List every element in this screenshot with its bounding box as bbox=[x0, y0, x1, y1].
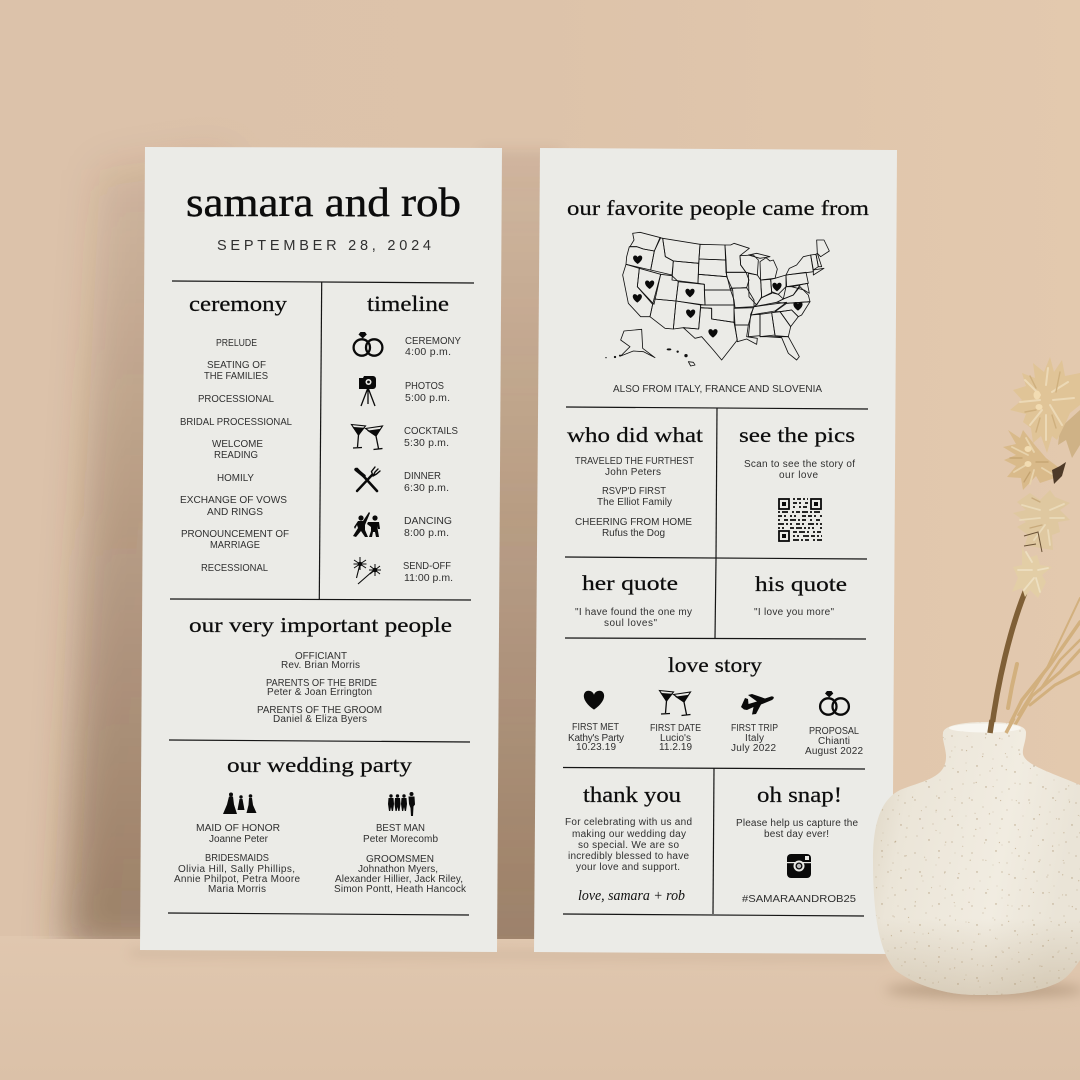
groom party names bbox=[334, 823, 467, 895]
first trip: Italy bbox=[745, 733, 764, 744]
see the pics text: our love bbox=[779, 470, 818, 481]
people list: OFFICIANT bbox=[295, 651, 347, 662]
icon: rings bbox=[820, 691, 849, 715]
people list bbox=[257, 651, 382, 725]
timeline dinner bbox=[404, 470, 449, 494]
panel: his quote bbox=[754, 572, 847, 618]
floor contact shadow bbox=[130, 951, 890, 959]
people list: PARENTS OF THE BRIDE bbox=[266, 678, 377, 689]
US map with hearts bbox=[605, 232, 829, 366]
bridal party names: Joanne Peter bbox=[209, 834, 269, 845]
vase mouth bbox=[949, 724, 1021, 732]
vase bbox=[873, 718, 1080, 998]
first met: 10.23.19 bbox=[576, 742, 616, 753]
first trip: FIRST TRIP bbox=[731, 723, 778, 734]
floor bbox=[0, 936, 1080, 1080]
heading: important people: our very important people bbox=[189, 613, 452, 637]
heading: timeline: timeline bbox=[367, 291, 449, 316]
panel: ceremony bbox=[180, 291, 292, 574]
left card bbox=[140, 147, 502, 952]
panel: timeline bbox=[352, 291, 461, 584]
thank you message: so special. We are so bbox=[578, 840, 679, 851]
ceremony order list: READING bbox=[214, 449, 258, 461]
icon: heart bbox=[584, 691, 604, 710]
ceremony order list: HOMILY bbox=[217, 472, 254, 484]
bridal party names: Olivia Hill, Sally Phillips, bbox=[178, 864, 295, 875]
hashtag: #SAMARAANDROB25 bbox=[742, 893, 856, 905]
see the pics text: Scan to see the story of bbox=[744, 459, 855, 470]
thank you message: making our wedding day bbox=[572, 829, 686, 840]
bridal party names bbox=[174, 823, 300, 895]
ceremony order list: EXCHANGE OF VOWS bbox=[180, 494, 287, 506]
first trip bbox=[731, 723, 778, 754]
people list: Daniel & Eliza Byers bbox=[273, 714, 367, 725]
card shadows bbox=[65, 150, 560, 950]
panel: our wedding party bbox=[174, 753, 467, 895]
heading: ceremony: ceremony bbox=[189, 291, 288, 316]
panel: oh snap bbox=[736, 782, 858, 905]
who did what list: The Elliot Family bbox=[597, 497, 672, 508]
panel: her quote bbox=[575, 571, 692, 629]
timeline cocktails bbox=[404, 425, 458, 449]
thank you message bbox=[565, 817, 692, 873]
heading: thank you: thank you bbox=[583, 782, 681, 807]
who did what list: Rufus the Dog bbox=[602, 528, 665, 539]
left card paper bbox=[140, 147, 502, 952]
groom party names: Simon Pontt, Heath Hancock bbox=[334, 884, 467, 895]
timeline send-off: 11:00 p.m. bbox=[404, 572, 453, 584]
ceremony order list: AND RINGS bbox=[207, 506, 263, 518]
map caption: ALSO FROM ITALY, FRANCE AND SLOVENIA bbox=[613, 383, 822, 395]
first date: Lucio's bbox=[660, 733, 691, 744]
timeline cocktails: 5:30 p.m. bbox=[404, 437, 449, 449]
vase shadow bbox=[885, 982, 1080, 998]
thank you message: incredibly blessed to have bbox=[568, 851, 689, 862]
icon: cocktail glasses bbox=[352, 424, 382, 450]
timeline dinner: 6:30 p.m. bbox=[404, 482, 449, 494]
vase speckles second layer bbox=[873, 722, 1080, 995]
icon: cocktail glasses bbox=[660, 690, 690, 716]
who did what list: CHEERING FROM HOME bbox=[575, 517, 692, 528]
timeline dancing: 8:00 p.m. bbox=[404, 527, 449, 539]
see the pics text bbox=[744, 459, 855, 481]
timeline send-off bbox=[403, 560, 453, 584]
stems entering mouth bbox=[990, 718, 1014, 733]
panel: thank you bbox=[565, 782, 692, 904]
ceremony order list: BRIDAL PROCESSIONAL bbox=[180, 416, 292, 428]
timeline ceremony: CEREMONY bbox=[405, 335, 461, 347]
timeline photos: PHOTOS bbox=[405, 380, 444, 392]
icon: sparklers bbox=[354, 557, 381, 584]
ceremony order list: SEATING OF bbox=[207, 359, 266, 371]
who did what list: RSVP'D FIRST bbox=[602, 486, 666, 497]
her quote text bbox=[575, 607, 692, 629]
date: SEPTEMBER 28, 2024 bbox=[217, 238, 431, 254]
panel: who did what bbox=[567, 423, 703, 539]
timeline dancing bbox=[404, 515, 452, 539]
right card paper bbox=[534, 148, 897, 954]
icon: dancers bbox=[353, 512, 380, 537]
groom party names: Peter Morecomb bbox=[363, 834, 438, 845]
his quote text: "I love you more" bbox=[754, 607, 834, 618]
first date bbox=[650, 723, 701, 753]
first date: FIRST DATE bbox=[650, 723, 701, 734]
first met: FIRST MET bbox=[572, 722, 619, 733]
first trip: July 2022 bbox=[731, 743, 776, 754]
her quote text: soul loves" bbox=[604, 618, 657, 629]
main stem bbox=[991, 592, 1025, 733]
timeline dancing: DANCING bbox=[404, 515, 452, 527]
people list: Rev. Brian Morris bbox=[281, 660, 360, 671]
heading: who did what: who did what bbox=[567, 423, 703, 447]
proposal bbox=[805, 726, 863, 757]
bridal party names: Annie Philpot, Petra Moore bbox=[174, 874, 300, 885]
people list: PARENTS OF THE GROOM bbox=[257, 705, 382, 716]
vase speckles bbox=[873, 722, 1080, 995]
groom party names: GROOMSMEN bbox=[366, 854, 434, 865]
icon: instagram camera bbox=[787, 854, 811, 878]
ceremony order list: PROCESSIONAL bbox=[198, 393, 274, 405]
heading: her quote: her quote bbox=[582, 571, 678, 595]
thank you message: For celebrating with us and bbox=[565, 817, 692, 828]
dried plant bbox=[991, 357, 1080, 733]
ceremony order list: THE FAMILIES bbox=[204, 370, 268, 382]
icon: rings bbox=[354, 332, 382, 356]
panel: our favorite people came from bbox=[567, 196, 869, 395]
vase body bbox=[873, 722, 1080, 995]
ceremony order list: PRELUDE bbox=[216, 337, 257, 349]
panel: our very important people bbox=[189, 613, 452, 725]
timeline ceremony: 4:00 p.m. bbox=[405, 346, 451, 358]
vase base shading bbox=[873, 722, 1080, 995]
oh snap message: best day ever! bbox=[764, 829, 829, 840]
grass stems bbox=[1006, 598, 1080, 732]
icon: bride and bridesmaids bbox=[223, 792, 256, 814]
thank you message: your love and support. bbox=[576, 862, 680, 873]
ceremony order list: RECESSIONAL bbox=[201, 562, 268, 574]
ceremony order list: PRONOUNCEMENT OF bbox=[181, 528, 289, 540]
heading: see the pics: see the pics bbox=[739, 423, 855, 447]
groom party names: BEST MAN bbox=[376, 823, 425, 834]
ceremony order list: WELCOME bbox=[212, 438, 263, 450]
timeline dinner: DINNER bbox=[404, 470, 441, 482]
who did what list: John Peters bbox=[605, 467, 661, 478]
bridal party names: Maria Morris bbox=[208, 884, 266, 895]
oh snap message: Please help us capture the bbox=[736, 818, 858, 829]
groom party names: Johnathon Myers, bbox=[358, 864, 438, 875]
icon: airplane bbox=[741, 694, 774, 714]
heading: love story: love story bbox=[668, 653, 762, 677]
timeline photos bbox=[405, 380, 450, 404]
icon: knife and fork bbox=[356, 467, 380, 491]
QR code bbox=[778, 499, 822, 541]
proposal: PROPOSAL bbox=[809, 726, 859, 737]
bridal party names: MAID OF HONOR bbox=[196, 823, 280, 834]
panel: love story bbox=[568, 653, 863, 757]
heading: favorite people: our favorite people came from bbox=[567, 196, 869, 220]
who did what list bbox=[575, 456, 694, 539]
timeline send-off: SEND-OFF bbox=[403, 560, 451, 572]
first met: Kathy's Party bbox=[568, 733, 624, 744]
heading: oh snap: oh snap! bbox=[757, 782, 842, 807]
timeline photos: 5:00 p.m. bbox=[405, 392, 450, 404]
oh snap message bbox=[736, 818, 858, 840]
panel: see the pics bbox=[739, 423, 855, 541]
ceremony order list bbox=[180, 337, 292, 574]
timeline ceremony bbox=[405, 335, 461, 358]
heading: wedding party: our wedding party bbox=[227, 753, 412, 777]
who did what list: TRAVELED THE FURTHEST bbox=[575, 456, 694, 467]
signature: love, samara + rob bbox=[578, 888, 685, 904]
groom party names: Alexander Hillier, Jack Riley, bbox=[335, 874, 463, 885]
timeline cocktails: COCKTAILS bbox=[404, 425, 458, 437]
proposal: August 2022 bbox=[805, 746, 863, 757]
first date: 11.2.19 bbox=[659, 742, 692, 753]
flower heads bbox=[1003, 357, 1080, 598]
bridal party names: BRIDESMAIDS bbox=[205, 853, 269, 864]
right card bbox=[534, 148, 897, 954]
title: samara and rob bbox=[186, 179, 461, 225]
ceremony order list: MARRIAGE bbox=[210, 539, 260, 551]
people list: Peter & Joan Errington bbox=[267, 687, 372, 698]
icon: camera on tripod bbox=[359, 376, 376, 406]
heading: his quote: his quote bbox=[755, 572, 847, 596]
icon: groom and groomsmen bbox=[388, 792, 415, 816]
proposal: Chianti bbox=[818, 736, 850, 747]
first met bbox=[568, 722, 624, 753]
her quote text: "I have found the one my bbox=[575, 607, 692, 618]
